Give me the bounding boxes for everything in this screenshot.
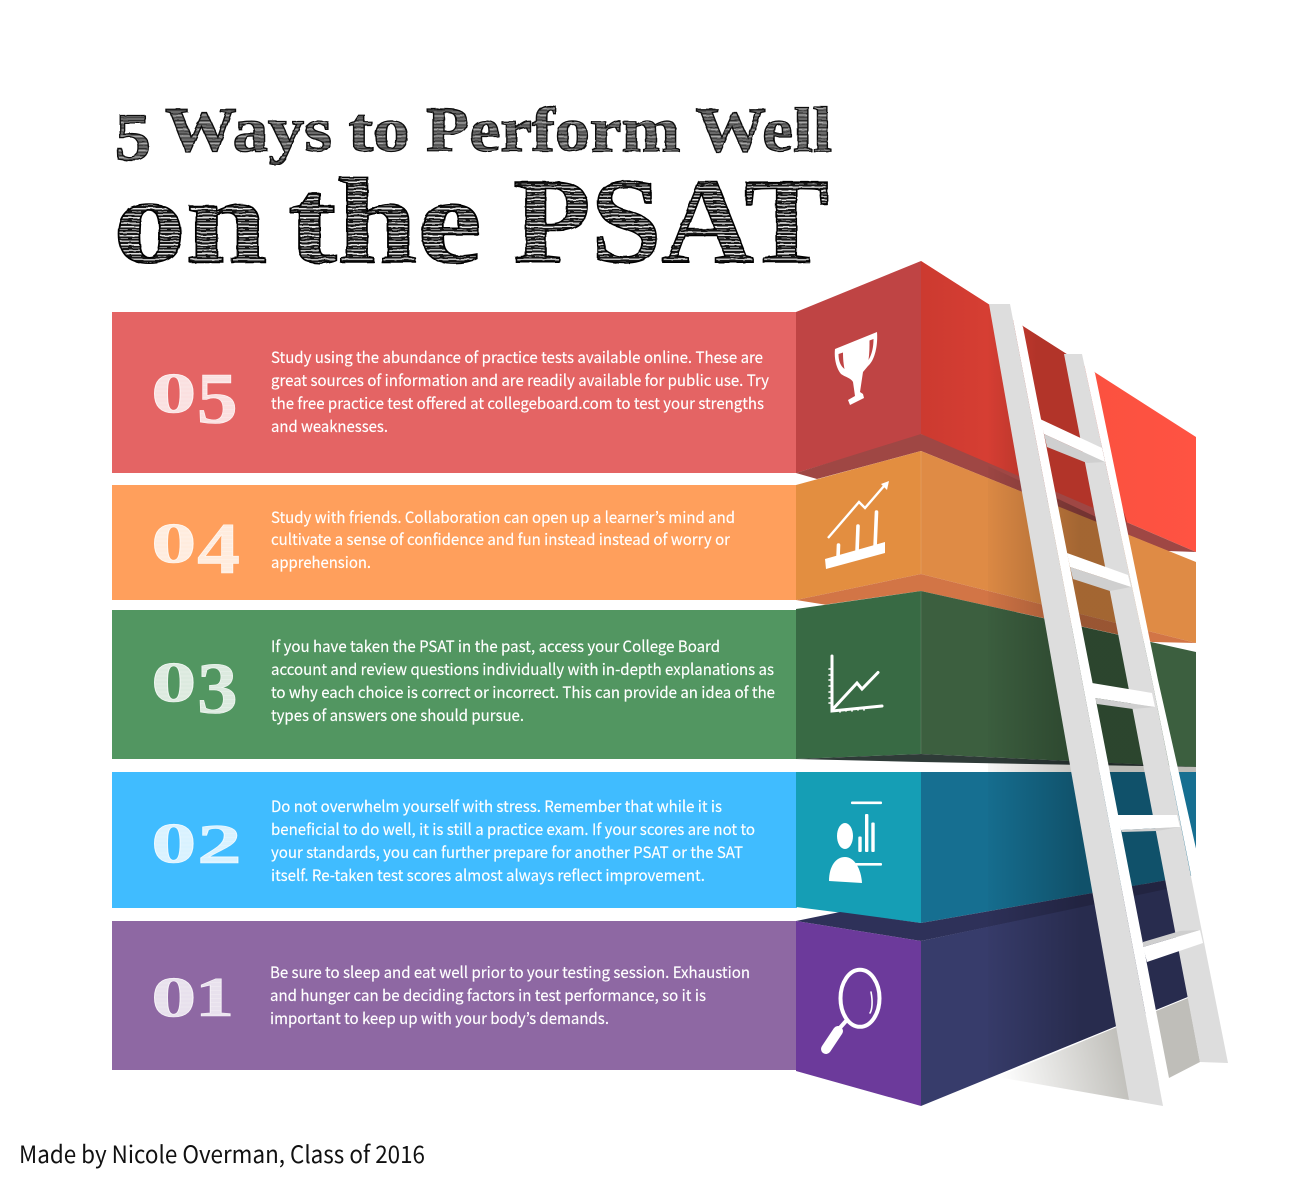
number 05: 0: [151, 362, 197, 425]
rung 2: [1067, 553, 1131, 591]
number 01: [151, 966, 234, 1029]
number 04: 0: [151, 512, 197, 575]
title line 1: Perform: [426, 94, 680, 165]
text: tip 02: Do not overwhelm yourself with stress. Remember that while it is: [271, 795, 722, 817]
panel: tip 02: [112, 772, 797, 908]
text: tip 04: Study with friends. Collaboration can open up a learner’s mind and: [271, 506, 735, 528]
number 03: 0: [151, 651, 197, 714]
title line 1: Ways: [165, 94, 332, 165]
text: tip 02: itself. Re-taken test scores almost always reflect improvement.: [271, 864, 705, 886]
text: tip 04: apprehension.: [271, 551, 371, 573]
title line 2: PSAT: [513, 154, 829, 289]
text: tip 05: [271, 346, 769, 437]
face seam: [920, 451, 922, 754]
text: tip 01: important to keep up with your body’s demands.: [270, 1007, 609, 1029]
book 01 purple: [796, 876, 1190, 1106]
text: tip 01: [270, 961, 750, 1029]
text: tip 05: and weaknesses.: [271, 415, 388, 437]
number 04: 4: [197, 509, 240, 589]
number 01: 1: [195, 966, 234, 1028]
ladder: [989, 304, 1228, 1106]
icon: magnifying glass: [826, 970, 880, 1049]
credit: Made by Nicole Overman, Class of 2016: [19, 1135, 425, 1170]
text: tip 03: If you have taken the PSAT in the past, access your College Board: [271, 635, 720, 657]
title line 2: on: [113, 154, 267, 289]
text: tip 05: great sources of information and are readily available for public use. Try: [271, 369, 769, 391]
text: tip 02: [271, 795, 755, 886]
text: tip 03: types of answers one should pursue.: [271, 704, 524, 726]
text: tip 04: cultivate a sense of confidence and fun instead instead of worry or: [271, 528, 731, 550]
title line 1: 5: [115, 99, 151, 175]
panel: tip 04: [112, 485, 797, 600]
ladder shading on books: [994, 472, 1188, 1070]
number 02: 2: [197, 814, 242, 876]
left rail: [989, 304, 1169, 1106]
rung 4: [1117, 815, 1180, 832]
book 05 red: [796, 261, 1196, 552]
text: tip 03: to why each choice is correct or incorrect. This can provide an idea of the: [271, 681, 775, 703]
panel: tip 03: [112, 610, 797, 759]
book stack: [796, 261, 1214, 1110]
number 04: [151, 509, 240, 589]
icon: line graph: [829, 656, 882, 712]
title line 1: Well: [696, 94, 832, 165]
number 01: 0: [151, 966, 197, 1029]
rung 5: [1143, 930, 1203, 962]
book 03 green: [796, 591, 1196, 767]
rung 1: [1040, 419, 1105, 463]
number 03: 3: [197, 648, 238, 729]
title line 2: [113, 154, 829, 289]
panel: tip 01: [112, 921, 797, 1070]
text: tip 01: Be sure to sleep and eat well prior to your testing session. Exhaustion: [270, 961, 750, 983]
text: tip 01: and hunger can be deciding factors in test performance, so it is: [270, 984, 706, 1006]
number 02: 0: [151, 812, 197, 875]
text: tip 03: account and review questions individually with in-depth explanations as: [271, 658, 774, 680]
title line 2: the: [288, 154, 482, 289]
text: tip 02: beneficial to do well, it is still a practice exam. If your scores are not to: [271, 818, 755, 840]
book 02 blue: [796, 772, 1196, 923]
text: tip 03: [271, 635, 775, 726]
icon: growth chart: [825, 481, 889, 569]
ground shadow: [997, 998, 1200, 1100]
title line 1: to: [348, 94, 410, 165]
right rail: [1064, 354, 1228, 1063]
panel: tip 05: [112, 312, 797, 473]
icon: presenter: [829, 802, 882, 883]
number 05: [151, 358, 238, 439]
book 04 orange: [796, 451, 1196, 643]
text: tip 04: [271, 506, 735, 573]
text: tip 02: your standards, you can further prepare for another PSAT or the SAT: [271, 841, 743, 863]
text: tip 05: Study using the abundance of practice tests available online. These are: [271, 346, 763, 368]
title line 1: [115, 94, 832, 175]
number 03: [151, 648, 238, 729]
text: tip 05: the free practice test offered at collegeboard.com to test your strengths: [271, 392, 764, 414]
rung 3: [1092, 683, 1155, 709]
icon: trophy: [835, 332, 877, 405]
number 02: [151, 812, 242, 876]
gap shadow between green and blue books: [988, 762, 1196, 772]
number 05: 5: [197, 358, 238, 439]
